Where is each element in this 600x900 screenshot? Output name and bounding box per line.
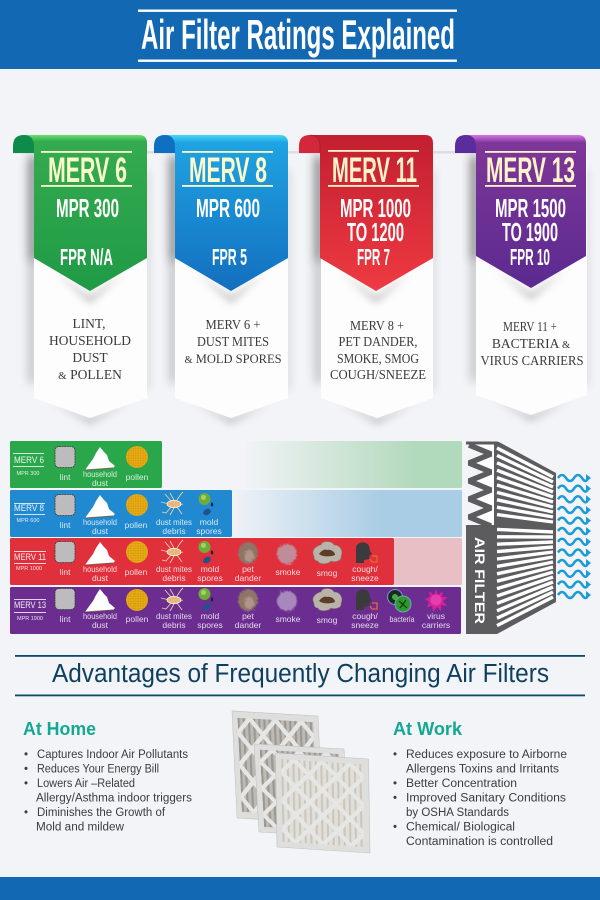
icon: pollen: pollen	[125, 567, 148, 577]
description: COUGH/SNEEZE	[330, 367, 426, 382]
description: LINT,	[72, 316, 106, 331]
list: at home benefits	[24, 749, 192, 834]
icon: dust mites	[156, 492, 192, 536]
icon: lint: lint	[60, 520, 71, 530]
icon: pet dander: dander	[235, 573, 261, 583]
banner	[466, 135, 586, 288]
icon: pollen: pollen	[125, 520, 148, 530]
panel: MERV 13 ribbon: TO 1900	[502, 217, 558, 247]
icon: bacteria	[388, 590, 415, 624]
chart row: MERV 11: MPR 1000	[16, 566, 42, 572]
icon: lint: lint	[60, 567, 71, 577]
panel: MERV 13 ribbon	[455, 135, 588, 421]
icon: household dust: household	[83, 564, 117, 574]
icon: mold spores: mold	[201, 564, 219, 574]
icon: dust mites: dust mites	[156, 611, 192, 621]
list: at home benefits: Diminishes the Growth of	[37, 807, 166, 819]
list: at home benefits: •	[24, 778, 28, 790]
description	[49, 316, 131, 382]
icon: dust mites: debris	[162, 573, 186, 583]
icon: cough/sneeze	[351, 589, 379, 630]
list: at home benefits: •	[24, 749, 28, 761]
list: at work benefits: Better Concentration	[406, 778, 517, 790]
list: at home benefits: Captures Indoor Air Pollutants	[37, 749, 188, 761]
chart row: MERV 8: MPR 600	[17, 518, 39, 524]
section heading: advantages: Advantages of Frequently Changing Air Filters	[52, 660, 549, 688]
panel: MERV 6 ribbon	[13, 135, 149, 424]
description: & POLLEN	[58, 367, 122, 382]
icon: household dust: dust	[92, 478, 109, 488]
icon: mold spores	[197, 588, 223, 630]
icon: household dust: household	[83, 469, 117, 479]
ribbon shadow line	[13, 151, 586, 154]
icon: mold spores: mold	[201, 611, 219, 621]
icon: lint: lint	[60, 472, 71, 482]
banner	[24, 135, 147, 291]
list: at home benefits: Reduces Your Energy Bill	[37, 764, 159, 776]
description: PET DANDER,	[338, 334, 418, 349]
icon: household dust	[83, 542, 117, 583]
list: at work benefits: by OSHA Standards	[406, 807, 509, 819]
chart row: MERV 11: MERV 11	[14, 552, 46, 563]
chart row: MERV 13	[10, 587, 461, 634]
icon: pollen: pollen	[126, 472, 149, 482]
chart row: MERV 6: MERV 6	[14, 455, 44, 466]
icon: dust mites: debris	[162, 620, 186, 630]
description: MERV 11 +	[503, 319, 557, 334]
footer band	[0, 877, 600, 900]
list: at work benefits: •	[393, 778, 397, 790]
icon: household dust: dust	[92, 526, 109, 536]
panel: MERV 8 ribbon: MPR 600	[196, 193, 260, 223]
description: BACTERIA &	[492, 336, 570, 351]
description: DUST MITES	[197, 334, 269, 349]
icon: mold spores: spores	[197, 620, 223, 630]
icon: lint	[55, 494, 75, 530]
icon: virus: virus	[427, 611, 445, 621]
icon: pollen	[126, 446, 149, 482]
icon: mold spores: mold	[200, 517, 218, 527]
air filter diagram	[466, 442, 556, 634]
icon: household dust: dust	[92, 573, 109, 583]
list: at work benefits: Chemical/ Biological	[406, 822, 515, 834]
icon: pet dander: dander	[235, 620, 261, 630]
icon: mold spores	[197, 541, 223, 583]
panel: MERV 6 ribbon: MPR 300	[56, 193, 119, 223]
list: at work benefits	[393, 749, 567, 848]
description: SMOKE, SMOG	[337, 351, 419, 366]
icon: cough/sneeze: cough/	[352, 611, 378, 621]
icon: lint: lint	[60, 614, 71, 624]
list: at home benefits: •	[24, 764, 28, 776]
panel: MERV 6 ribbon: MERV 6	[48, 151, 127, 190]
icon: cough/sneeze: cough/	[352, 564, 378, 574]
icon: pollen: pollen	[126, 614, 149, 624]
icon: pollen	[126, 589, 149, 624]
icon: smoke	[275, 544, 301, 577]
description: MERV 8 +	[350, 318, 404, 333]
icon: bacteria: bacteria	[390, 614, 415, 624]
list: at work benefits: Reduces exposure to Airborne	[406, 749, 567, 761]
panel: at work	[393, 719, 567, 848]
panel: MERV 8 ribbon: MERV 8	[189, 151, 267, 190]
description: VIRUS CARRIERS	[480, 353, 584, 368]
chart row: MERV 13: MERV 13	[14, 600, 46, 611]
list: at work benefits: •	[393, 822, 397, 834]
icon: lint	[55, 588, 75, 624]
icon: dust mites	[156, 540, 192, 583]
icon: mold spores	[196, 493, 222, 536]
description	[330, 318, 426, 382]
icon: household dust: dust	[92, 620, 109, 630]
chart row: MERV 6: MPR 300	[17, 471, 39, 477]
panel: MERV 6 ribbon: FPR N/A	[60, 244, 113, 270]
icon: virus	[422, 589, 450, 630]
heading: at home: At Home	[23, 719, 96, 739]
description: MERV 6 +	[206, 317, 260, 332]
icon: smoke: smoke	[275, 614, 301, 624]
banner	[165, 135, 288, 291]
icon: mold spores: spores	[196, 526, 222, 536]
icon: household dust	[83, 589, 117, 630]
list: at work benefits: Improved Sanitary Conditions	[406, 792, 566, 804]
chart row: MERV 8	[10, 490, 462, 537]
panel: MERV 11 ribbon	[299, 135, 435, 424]
chart row: MERV 8: MERV 8	[14, 503, 44, 514]
icon: pollen	[125, 494, 148, 530]
icon: smog: smog	[317, 615, 338, 625]
icon: pet dander	[235, 589, 261, 630]
panel: MERV 11 ribbon: MPR 1000	[340, 193, 411, 223]
icon: pet dander: pet	[242, 564, 255, 574]
panel: MERV 11 ribbon: FPR 7	[357, 244, 390, 270]
icon: household dust	[83, 495, 117, 536]
list: at home benefits: Mold and mildew	[36, 822, 125, 834]
icon: smog	[313, 542, 342, 578]
panel: MERV 11 ribbon: MERV 11	[332, 151, 417, 190]
icon: virus: carriers	[422, 620, 450, 630]
icon: pet dander: pet	[242, 611, 255, 621]
list: at work benefits: Allergens Toxins and Irritants	[406, 764, 559, 776]
chart row: MERV 13: MPR 1900	[17, 616, 43, 622]
icon: household dust: household	[83, 611, 117, 621]
icon: household dust: household	[83, 517, 117, 527]
heading: at work: At Work	[393, 719, 463, 739]
icon: cough/sneeze: sneeze	[351, 573, 379, 583]
panel: MERV 11 ribbon: TO 1200	[347, 217, 404, 247]
panel: at home	[23, 719, 192, 834]
image: pleated air filters	[232, 711, 370, 853]
description	[480, 319, 584, 368]
list: at home benefits: •	[24, 807, 28, 819]
icon: pet dander	[235, 542, 261, 583]
description: DUST	[72, 350, 108, 365]
chart row: MERV 6	[10, 441, 462, 488]
icon: pollen	[125, 541, 148, 577]
icon: dust mites: dust mites	[156, 517, 192, 527]
icon: dust mites: dust mites	[156, 564, 192, 574]
list: at home benefits: Allergy/Asthma indoor triggers	[36, 792, 192, 804]
air filter label: AIR FILTER	[472, 537, 488, 624]
panel: MERV 8 ribbon: FPR 5	[212, 244, 247, 270]
description: & MOLD SPORES	[184, 352, 282, 366]
icon: dust mites	[156, 588, 192, 630]
icon: mold spores: spores	[197, 573, 223, 583]
banner	[310, 135, 433, 291]
icon: cough/sneeze	[351, 542, 379, 583]
list: at work benefits: Contamination is controlled	[406, 836, 553, 848]
icon: smoke: smoke	[275, 567, 301, 577]
list: at work benefits: •	[393, 792, 397, 804]
icon: dust mites: debris	[162, 526, 186, 536]
clean air waves	[558, 474, 591, 599]
icon: household dust	[83, 447, 117, 488]
icon: cough/sneeze: sneeze	[351, 620, 379, 630]
chart row: MERV 11	[10, 538, 462, 585]
icon: smoke	[275, 591, 301, 624]
description: HOUSEHOLD	[49, 333, 131, 348]
list: at home benefits: Lowers Air –Related	[37, 778, 135, 790]
header band	[0, 0, 600, 69]
description	[184, 317, 282, 366]
icon: smog	[313, 589, 342, 625]
icon: lint	[55, 542, 75, 577]
panel: MERV 13 ribbon: FPR 10	[510, 244, 550, 270]
icon: lint	[55, 446, 75, 482]
list: at work benefits: •	[393, 749, 397, 761]
icon: smog: smog	[317, 568, 338, 578]
panel: MERV 8 ribbon	[154, 135, 290, 424]
